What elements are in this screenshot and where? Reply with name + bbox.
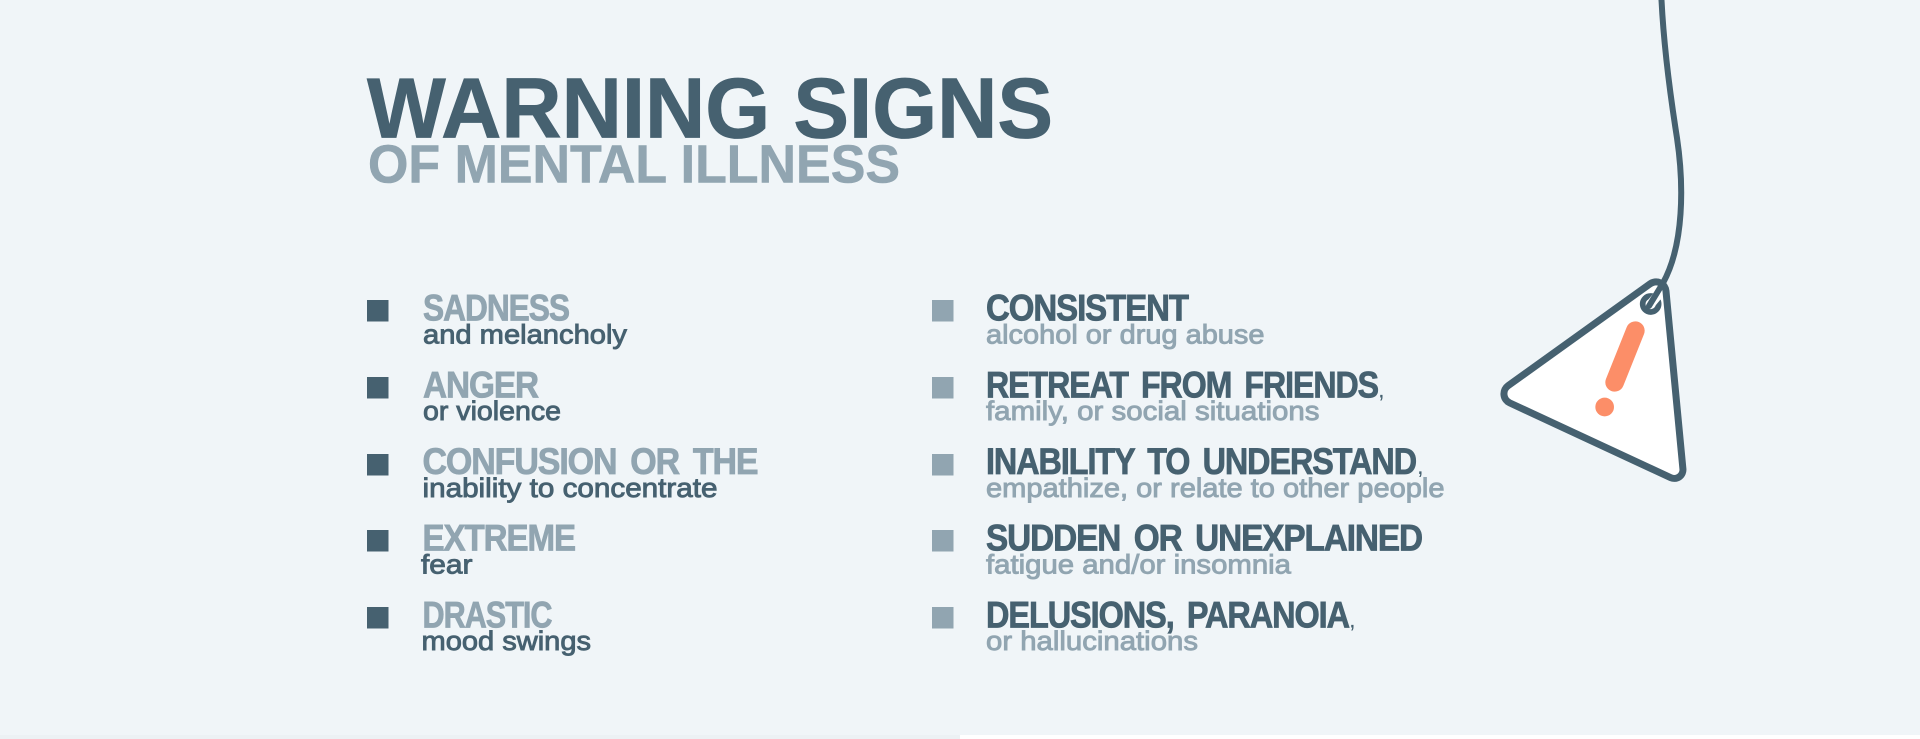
title: OF MENTAL ILLNESS bbox=[368, 134, 900, 194]
item: anger bbox=[367, 364, 561, 426]
hanging string bbox=[1649, 0, 1681, 306]
item: retreat: , bbox=[1378, 376, 1385, 403]
item: retreat: family, or social situations bbox=[986, 396, 1320, 426]
item: retreat: RETREAT FROM FRIENDS bbox=[986, 364, 1378, 405]
item: consistent: alcohol or drug abuse bbox=[986, 319, 1264, 349]
item: inability: , bbox=[1417, 453, 1424, 480]
item: anger: or violence bbox=[423, 396, 561, 426]
item: delusions bbox=[932, 594, 1356, 656]
item: drastic: DRASTIC bbox=[422, 594, 552, 635]
item: inability: empathize, or relate to other people bbox=[986, 473, 1444, 503]
item: sudden: SUDDEN OR UNEXPLAINED bbox=[986, 517, 1422, 558]
item: sadness: SADNESS bbox=[423, 288, 569, 329]
item: confusion: inability to concentrate bbox=[422, 473, 718, 503]
item: sadness bbox=[367, 288, 628, 349]
item: inability bbox=[932, 441, 1444, 503]
item: extreme: EXTREME bbox=[422, 517, 575, 558]
title: WARNING SIGNS bbox=[367, 62, 1053, 156]
item: confusion: CONFUSION OR THE bbox=[422, 441, 758, 482]
item: delusions: , bbox=[1349, 606, 1356, 633]
item: consistent: CONSISTENT bbox=[986, 288, 1189, 329]
item: extreme: fear bbox=[421, 550, 473, 580]
item: retreat bbox=[932, 364, 1385, 426]
item: drastic: mood swings bbox=[422, 626, 591, 656]
item: sudden: fatigue and/or insomnia bbox=[986, 550, 1292, 580]
icon: hanging warning tag bbox=[1504, 0, 1683, 478]
item: consistent bbox=[932, 288, 1264, 349]
item: inability: INABILITY TO UNDERSTAND bbox=[986, 441, 1416, 482]
item: delusions: DELUSIONS, PARANOIA bbox=[986, 594, 1349, 635]
item: sadness: and melancholy bbox=[423, 319, 628, 349]
item: confusion bbox=[367, 441, 758, 503]
panel: left column bbox=[367, 288, 758, 656]
item: extreme bbox=[367, 517, 575, 580]
item: anger: ANGER bbox=[423, 364, 538, 405]
panel: right column bbox=[932, 288, 1444, 656]
item: delusions: or hallucinations bbox=[986, 626, 1198, 656]
tag body bbox=[1504, 282, 1683, 478]
item: sudden bbox=[932, 517, 1422, 580]
item: drastic bbox=[367, 594, 591, 656]
